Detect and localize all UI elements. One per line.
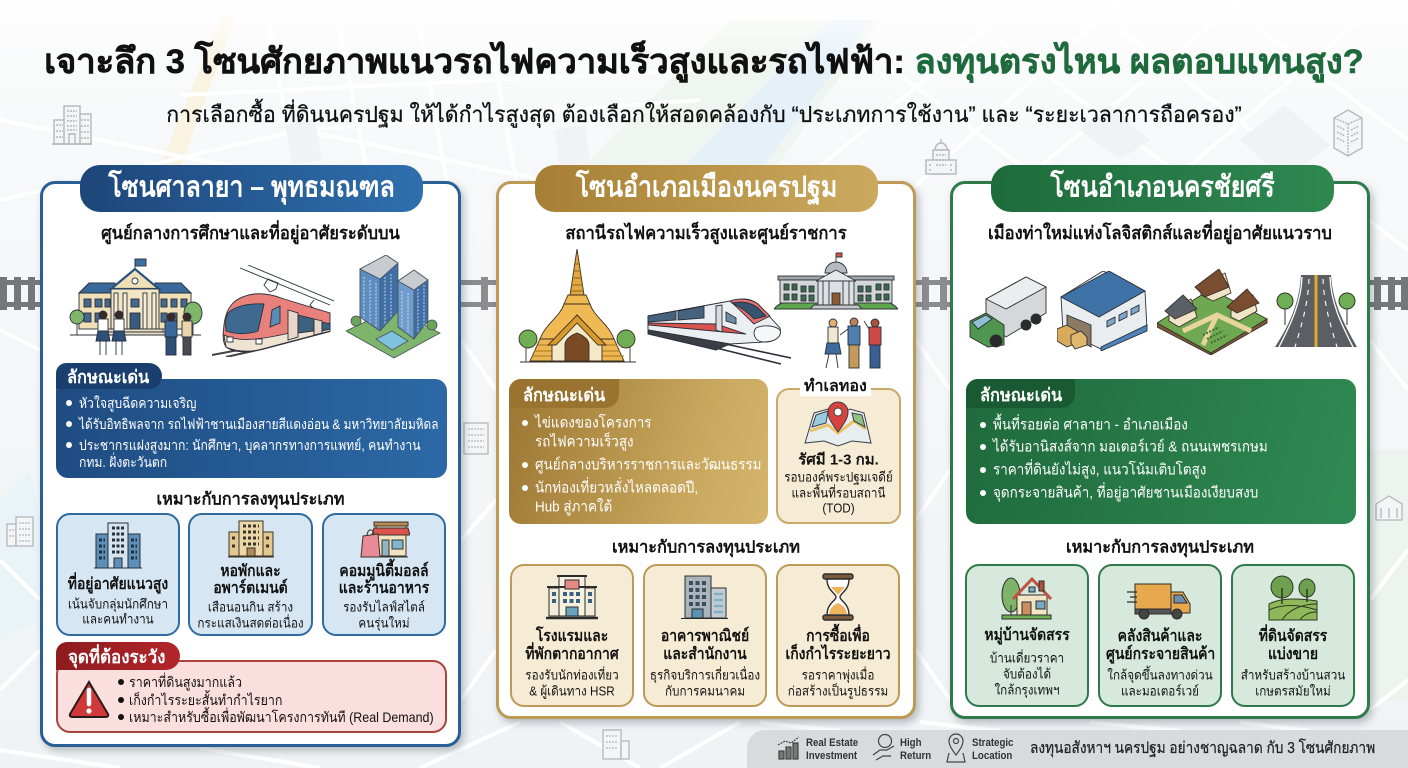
card description: กระแสเงินสดต่อเนื่อง (197, 616, 304, 630)
card description: & ผู้เดินทาง HSR (529, 684, 615, 698)
card description: ใกล้กรุงเทพฯ (994, 682, 1060, 698)
bullet list: กทม. ฝั่งตะวันตก (79, 454, 167, 470)
label: high return (900, 737, 935, 763)
icon: warehouse (1057, 271, 1151, 351)
icon: map with pin (804, 401, 872, 447)
bullet list: Hub สู่ภาคใต้ (535, 498, 612, 516)
icon: delivery truck (1127, 582, 1193, 620)
panel: Mueang Nakhon Pathom zone (494, 165, 924, 728)
tab: caution (56, 642, 180, 670)
card title (1231, 628, 1355, 664)
icon: high-rise towers (346, 255, 441, 358)
card description (68, 596, 168, 626)
icon: apartment building (228, 520, 274, 558)
heading: zone name (80, 165, 423, 212)
card title: อพาร์ตเมนต์ (213, 580, 288, 597)
icon: hourglass (822, 573, 854, 621)
tab: caution: จุดที่ต้องระวัง (68, 647, 165, 667)
location text: รอบองค์พระปฐมเจดีย์ (784, 470, 893, 484)
panel: key characteristics (509, 379, 768, 524)
bullet list: ศูนย์กลางบริหารราชการและวัฒนธรรม (535, 456, 761, 474)
card description (776, 666, 900, 702)
card title (1098, 628, 1222, 664)
tab: characteristics (509, 379, 619, 408)
label: strategic location: Strategic (972, 737, 1013, 749)
bullet list: ได้รับอิทธิพลจาก รถไฟฟ้าชานเมืองสายสีแดงอ่อน & มหาวิทยาลัยมหิดล (79, 416, 438, 432)
card description: และคนทำงาน (82, 612, 154, 626)
location text: และพื้นที่รอบสถานี (792, 486, 885, 500)
railway track right (1370, 277, 1408, 310)
card title: ที่พักตากอากาศ (525, 646, 619, 663)
icon: shop and shopping bag (360, 522, 410, 558)
footer slogan: ลงทุนอสังหาฯ นครปฐม อย่างชาญฉลาด กับ 3 โซนศักยภาพ (1030, 740, 1375, 757)
icon: hotel (546, 574, 598, 620)
card: subdivided land (1231, 564, 1355, 707)
heading: suitable investment types: เหมาะกับการลงทุนประเภท (1066, 538, 1254, 556)
bullet list (966, 415, 1356, 505)
zone tagline: สถานีรถไฟความเร็วสูงและศูนย์ราชการ (565, 223, 847, 243)
icon: apartment tower (94, 522, 142, 568)
tab: characteristics: ลักษณะเด่น (67, 367, 149, 387)
card description: คนรุ่นใหม่ (358, 616, 410, 630)
heading: suitable investment types: เหมาะกับการลงทุนประเภท (157, 490, 344, 508)
card description (643, 666, 767, 702)
zone tagline: ศูนย์กลางการศึกษาและที่อยู่อาศัยระดับบน (101, 223, 400, 243)
bullet list: ไข่แดงของโครงการ (535, 414, 651, 432)
label: real estate investment (806, 737, 859, 763)
heading: golden location: ทำเลทอง (804, 378, 867, 395)
card title (339, 558, 430, 597)
bullet list: ประชากรแฝงสูงมาก: นักศึกษา, บุคลากรทางการแพทย์, คนทำงาน (79, 437, 421, 453)
tab: characteristics: ลักษณะเด่น (523, 385, 605, 405)
heading: suitable investment types: เหมาะกับการลงทุนประเภท (612, 538, 800, 556)
background icon: building between panels (463, 422, 489, 455)
card: dormitories and apartments (188, 513, 313, 636)
tab: characteristics: ลักษณะเด่น (980, 385, 1062, 405)
card description: กับการคมนาคม (665, 684, 745, 698)
bullet list: พื้นที่รอยต่อ ศาลายา - อำเภอเมือง (993, 416, 1188, 434)
card description (965, 649, 1089, 699)
card description: และมอเตอร์เวย์ (1121, 684, 1199, 698)
railway track left (0, 277, 40, 310)
card title: คอมมูนิตี้มอลล์ (339, 563, 429, 580)
card title: และสำนักงาน (663, 646, 747, 663)
card: housing estates (965, 564, 1089, 707)
icon: warning triangle (68, 680, 110, 718)
card description: ธุรกิจบริการเกี่ยวเนื่อง (650, 668, 760, 682)
icon: university with students (70, 258, 202, 356)
icon: strategic location (946, 733, 966, 763)
icon: high-speed train (648, 298, 792, 365)
bullet list: จุดกระจายสินค้า, ที่อยู่อาศัยชานเมืองเงียบสงบ (993, 484, 1258, 502)
bullet list: รถไฟความเร็วสูง (535, 434, 634, 450)
card description: ก่อสร้างเป็นรูปธรรม (788, 684, 888, 698)
card: long-term speculation (776, 564, 900, 707)
card description: รองรับไลฟ์สไตล์ (343, 600, 425, 614)
caution bullet list (118, 672, 434, 725)
panel: key characteristics (56, 363, 447, 478)
card title: ที่ดินจัดสรร (1259, 628, 1327, 645)
card title: โรงแรมและ (536, 628, 608, 645)
label: high return: Return (900, 750, 931, 762)
icon: real estate investment (777, 735, 801, 761)
card title (776, 628, 900, 664)
card title: และร้านอาหาร (339, 580, 429, 597)
label: real estate investment: Real Estate (806, 737, 858, 749)
card title: คลังสินค้าและ (1118, 628, 1202, 645)
card title: ที่อยู่อาศัยแนวสูง (68, 576, 168, 593)
background icon: building left middle (6, 516, 34, 547)
panel: key characteristics (966, 379, 1356, 524)
icon: farmland with trees (1268, 574, 1318, 621)
title: เจาะลึก 3 โซนศักยภาพแนวรถไฟความเร็วสูงและรถไฟฟ้า: ลงทุนตรงไหน ผลตอบแทนสูง? (44, 43, 1364, 81)
label: high return: High (900, 737, 922, 749)
icon: container truck (968, 275, 1048, 349)
tab: characteristics (966, 379, 1075, 408)
icon: high return (872, 733, 896, 763)
footer bar (747, 730, 1408, 768)
card description (197, 600, 304, 630)
card: hotels and resorts (510, 564, 634, 707)
background icon: office building top left (52, 105, 92, 145)
bullet list: นักท่องเที่ยวหลั่งไหลตลอดปี, (535, 480, 698, 496)
icon: tourists (824, 318, 882, 368)
card description: เกษตรสมัยใหม่ (1255, 684, 1331, 698)
heading: zone name (535, 165, 878, 212)
background icon: building bottom centre (602, 729, 630, 760)
icon: highway (1275, 275, 1357, 349)
card title (510, 628, 634, 664)
caution bullet list: เก็งกำไรระยะสั้นทำกำไรยาก (129, 692, 282, 708)
icon: Phra Pathom Chedi (518, 249, 636, 362)
label: strategic location: Location (972, 750, 1012, 762)
label: strategic location (972, 737, 1016, 763)
card: community malls and restaurants (322, 513, 446, 636)
card description: บ้านเดี่ยวราคา (990, 650, 1064, 666)
card description: เสือนอนกิน สร้าง (208, 600, 293, 614)
location text: (TOD) (822, 500, 855, 516)
tab: characteristics (56, 363, 162, 389)
card description: เน้นจับกลุ่มนักศึกษา (68, 596, 168, 612)
card description: จับต้องได้ (1003, 666, 1051, 682)
card title: ศูนย์กระจายสินค้า (1106, 646, 1215, 663)
card description: สำหรับสร้างบ้านสวน (1241, 668, 1345, 682)
bullet list: ได้รับอานิสงส์จาก มอเตอร์เวย์ & ถนนเพชรเกษม (993, 438, 1268, 456)
icon: light red commuter train (212, 265, 334, 357)
location text (776, 449, 901, 515)
card title: เก็งกำไรระยะยาว (785, 646, 891, 663)
panel: Nakhon Chai Si zone (950, 165, 1370, 719)
card description (1098, 666, 1222, 702)
card title: การซื้อเพื่อ (806, 628, 870, 645)
card title (643, 628, 767, 664)
card: high-rise residential (56, 513, 180, 636)
bullet list: ราคาที่ดินยังไม่สูง, แนวโน้มเติบโตสูง (993, 462, 1206, 478)
caution bullet list: เหมาะสำหรับซื้อเพื่อพัฒนาโครงการทันที (Real Demand) (129, 709, 434, 725)
card description (510, 666, 634, 702)
zone tagline: เมืองท่าใหม่แห่งโลจิสติกส์และที่อยู่อาศัยแนวราบ (988, 223, 1332, 243)
bullet list (522, 414, 761, 516)
subtitle: การเลือกซื้อ ที่ดินนครปฐม ให้ได้กำไรสูงสุด ต้องเลือกให้สอดคล้องกับ “ประเภทการใช้งาน” และ “ระยะเวลาการถือครอง” (166, 102, 1242, 127)
location text: รัศมี 1-3 กม. (798, 452, 879, 468)
heading: zone name: โซนศาลายา – พุทธมณฑล (108, 172, 395, 204)
icon: housing estate (1157, 269, 1269, 355)
label: real estate investment: Investment (806, 750, 857, 762)
railway track between panels 2 and 3 (916, 277, 950, 310)
card title: อาคารพาณิชย์ (661, 628, 749, 645)
heading: zone name: โซนอำเภอนครชัยศรี (1050, 172, 1275, 204)
panel: Salaya - Phutthamonthon zone (38, 165, 468, 756)
railway track between panels 1 and 2 (461, 277, 496, 310)
card title: หมู่บ้านจัดสรร (984, 627, 1070, 644)
bullet list (66, 395, 438, 470)
panel: points of caution (56, 642, 447, 733)
icon: government building (774, 252, 898, 310)
card title: แบ่งขาย (1268, 646, 1318, 663)
background icon: building right middle (1375, 495, 1403, 521)
card description: ใกล้จุดขึ้นลงทางด่วน (1107, 668, 1213, 682)
background icon: tower top right (1333, 109, 1363, 157)
card title (213, 563, 288, 597)
card description (1231, 666, 1355, 702)
card: warehouses and distribution centres (1098, 564, 1222, 707)
heading: zone name: โซนอำเภอเมืองนครปฐม (576, 172, 837, 204)
heading: zone name (991, 165, 1334, 212)
panel: golden location (776, 378, 901, 524)
card description: รอราคาพุ่งเมื่อ (802, 668, 874, 682)
caution bullet list: ราคาที่ดินสูงมากแล้ว (129, 674, 242, 690)
card description: รองรับนักท่องเที่ยว (525, 668, 619, 682)
icon: office buildings (681, 574, 729, 620)
icon: detached house (1001, 575, 1053, 621)
card title: หอพักและ (220, 563, 281, 580)
bullet list: หัวใจสูบฉีดความเจริญ (79, 395, 196, 411)
card description (343, 600, 425, 631)
background icon: domed building (925, 139, 957, 175)
card: commercial buildings and offices (643, 564, 767, 707)
